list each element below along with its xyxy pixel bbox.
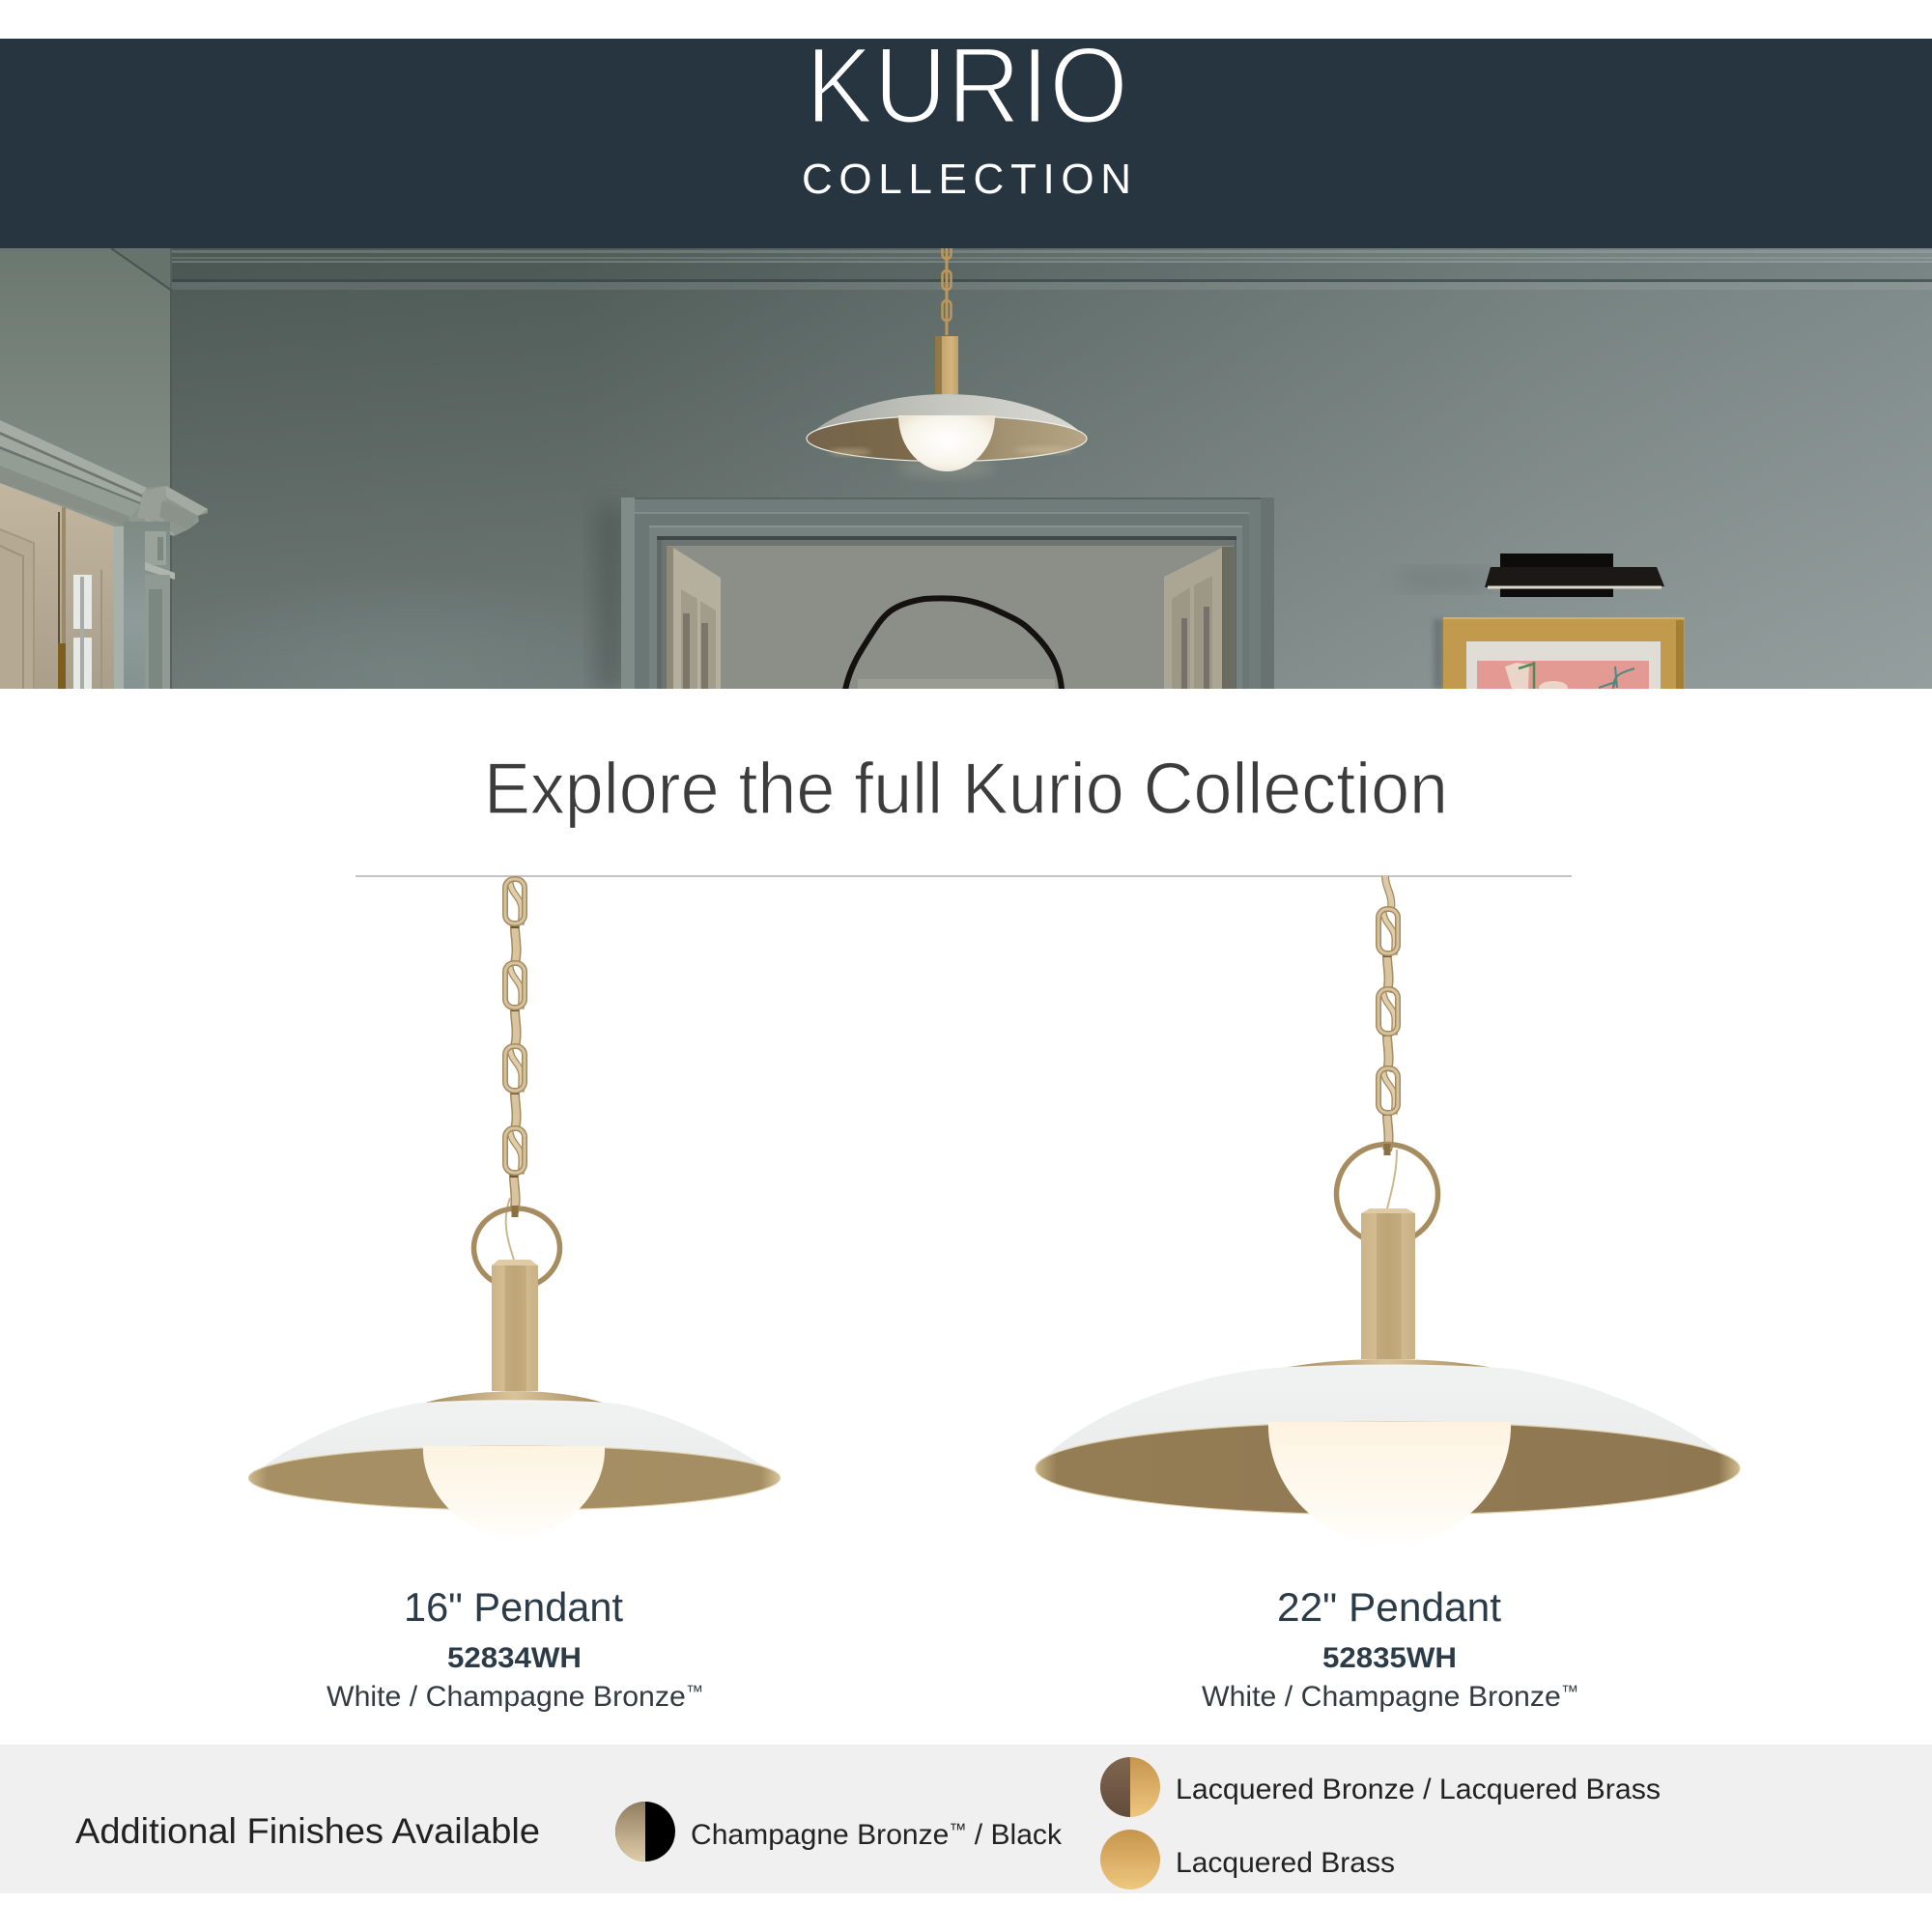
product: 22 inch pendant bbox=[1036, 876, 1740, 1544]
glass globe bbox=[1268, 1422, 1511, 1544]
header band bbox=[0, 25, 1932, 248]
title: KURIO: KURIO bbox=[806, 25, 1128, 146]
section heading: Explore the full Kurio Collection bbox=[484, 748, 1448, 829]
swatch: champagne bronze / black bbox=[615, 1802, 675, 1861]
subtitle: COLLECTION: COLLECTION bbox=[802, 156, 1131, 203]
swatch: lacquered bronze / brass bbox=[1100, 1757, 1160, 1817]
label: 22 inch pendant: 22" Pendant bbox=[1277, 1584, 1501, 1630]
flange bbox=[1264, 1359, 1512, 1372]
finish label: ™ bbox=[949, 1820, 966, 1839]
finish label: Lacquered Brass bbox=[1176, 1847, 1395, 1879]
door bbox=[0, 483, 114, 689]
ring bbox=[473, 1208, 560, 1288]
label: 16 inch pendant: White / Champagne Bronze bbox=[327, 1681, 683, 1713]
left wall section bbox=[0, 248, 208, 691]
wall bbox=[170, 248, 1932, 689]
doorway frame bbox=[597, 497, 1274, 691]
shade bbox=[1036, 1364, 1740, 1468]
crown molding bbox=[172, 250, 1932, 290]
label: 22 inch pendant: White / Champagne Bronze bbox=[1202, 1681, 1558, 1713]
chain bbox=[1378, 876, 1398, 1208]
sconce bbox=[1401, 554, 1664, 597]
finish label: Champagne Bronze bbox=[691, 1819, 949, 1851]
ring bbox=[1337, 1144, 1437, 1244]
swatch: lacquered brass bbox=[1100, 1830, 1160, 1889]
finish label: / Black bbox=[966, 1819, 1063, 1851]
black loop sculpture bbox=[845, 598, 1062, 690]
finishes heading: Additional Finishes Available bbox=[75, 1811, 540, 1851]
stem bbox=[492, 1260, 538, 1391]
finish label: Lacquered Bronze / Lacquered Brass bbox=[1176, 1774, 1661, 1805]
inner room bbox=[667, 546, 1234, 689]
cornice bbox=[0, 420, 208, 536]
label: 16 inch pendant bbox=[327, 1584, 703, 1713]
inner door left bbox=[667, 547, 721, 689]
stem bbox=[1361, 1208, 1415, 1359]
hanging pendant bbox=[807, 245, 1087, 477]
label: 22 inch pendant: 52835WH bbox=[1322, 1642, 1457, 1674]
label: 16 inch pendant: 16" Pendant bbox=[404, 1584, 623, 1630]
chain bbox=[943, 245, 951, 335]
room photo panel bbox=[0, 248, 1932, 689]
glass globe bbox=[423, 1446, 605, 1537]
shade bbox=[248, 1400, 781, 1479]
label: 22 inch pendant bbox=[1202, 1584, 1578, 1713]
chain bbox=[505, 879, 525, 1260]
framed picture bbox=[1434, 617, 1685, 695]
label: 16 inch pendant: 52834WH bbox=[447, 1642, 582, 1674]
finishes band bbox=[0, 1745, 1932, 1893]
divider bbox=[355, 875, 1572, 877]
pilaster bbox=[114, 522, 175, 691]
label: 16 inch pendant: ™ bbox=[686, 1682, 703, 1701]
product: 16 inch pendant bbox=[248, 879, 781, 1537]
inner door right bbox=[1164, 547, 1234, 689]
flange bbox=[411, 1391, 617, 1407]
label: 22 inch pendant: ™ bbox=[1561, 1682, 1578, 1701]
